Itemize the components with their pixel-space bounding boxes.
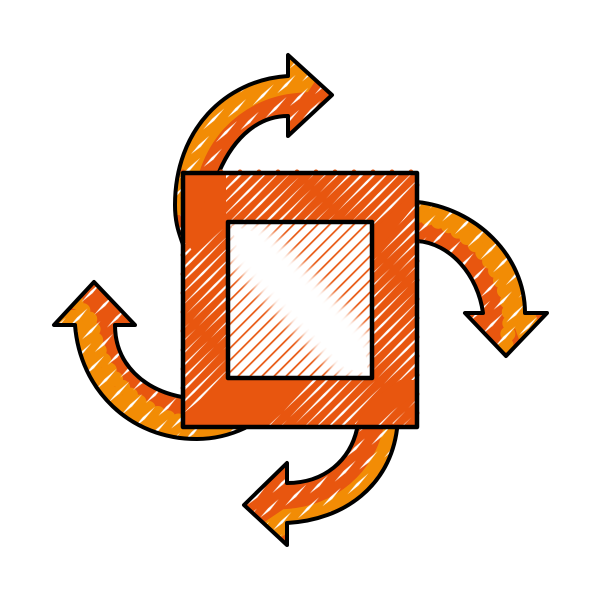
arrow: bottom xyxy=(240,425,400,550)
arrow: right xyxy=(419,200,549,358)
square frame xyxy=(183,172,417,427)
inner square xyxy=(228,222,372,378)
arrow: top xyxy=(170,50,340,250)
arrow: left xyxy=(50,280,250,445)
